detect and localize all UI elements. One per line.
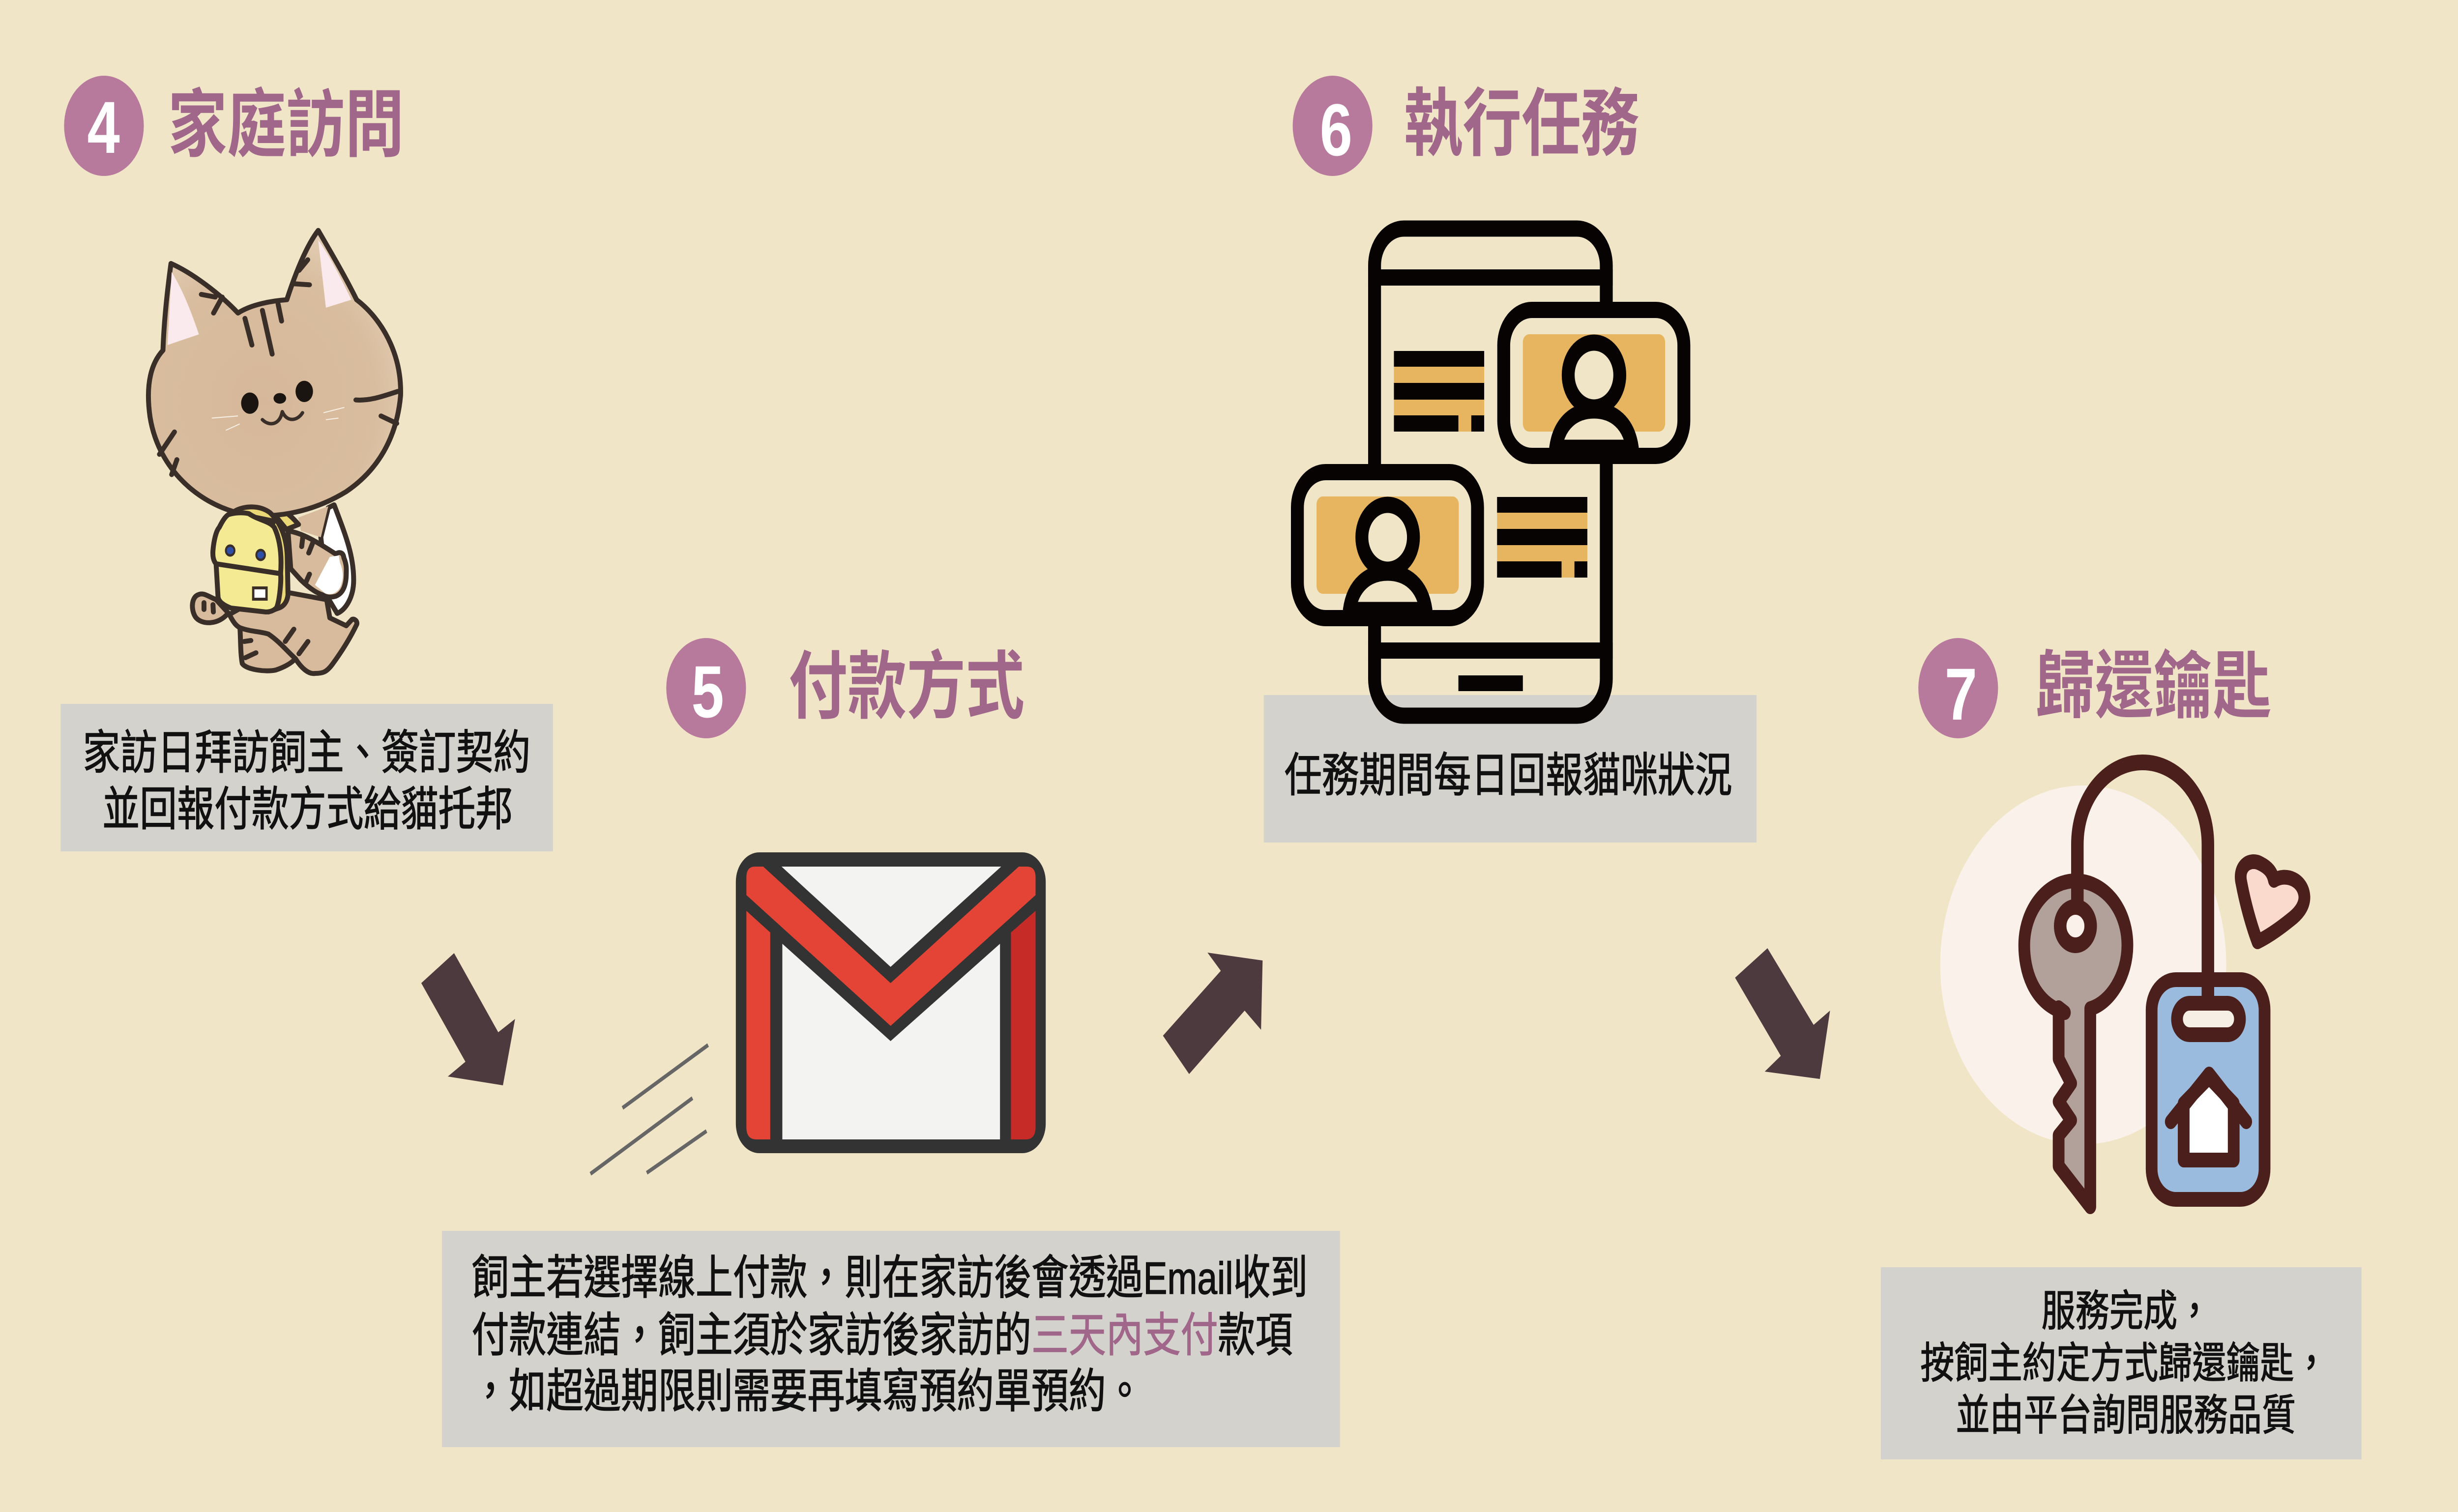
- icon: key with house tag and heart: [1940, 762, 2305, 1207]
- text block: home visit description: 並回報付款方式給貓托邦: [102, 784, 513, 836]
- text block: task description: [1264, 695, 1756, 843]
- arrow: step 4 to step 5: [421, 953, 515, 1085]
- arrow: step 5 to step 6: [1163, 953, 1262, 1074]
- illustration: tabby cat with yellow backpack: [0, 0, 401, 673]
- icon: Gmail envelope: [736, 852, 1046, 1153]
- heading: 家庭訪問: 家庭訪問: [168, 84, 404, 166]
- text block: home visit description: 家訪日拜訪飼主、簽訂契約: [83, 727, 530, 779]
- panel: step 7 return keys: [1881, 638, 2362, 1459]
- text block: home visit description: [60, 704, 553, 851]
- icon: motion lines: [590, 1045, 708, 1174]
- step number 7: 7: [1945, 653, 1977, 735]
- step number 6: 6: [1320, 88, 1352, 171]
- panel: step 6 perform task: [1264, 76, 1756, 843]
- text block: payment description: 付款連結，飼主須於家訪後家訪的三天內支付款項: [471, 1309, 1292, 1362]
- text block: payment description: ，如超過期限則需要再填寫預約單預約。: [471, 1366, 1143, 1418]
- step number 5: 5: [691, 650, 724, 733]
- text block: task description: 任務期間每日回報貓咪狀況: [1285, 750, 1732, 802]
- text block: payment description: [442, 1231, 1340, 1447]
- step number 6: [1293, 76, 1373, 176]
- step number 4: 4: [87, 86, 120, 169]
- text block: return keys description: 按飼主約定方式歸還鑰匙，: [1920, 1339, 2328, 1387]
- step number 5: [666, 638, 746, 738]
- text block: return keys description: 並由平台詢問服務品質: [1956, 1391, 2296, 1439]
- step number 7: [1918, 638, 1998, 738]
- arrow: step 6 to step 7: [1735, 948, 1830, 1079]
- icon: phone with profile cards: [1297, 229, 1684, 716]
- text block: return keys description: [1881, 1267, 2362, 1459]
- heading: 執行任務: 執行任務: [1404, 83, 1639, 165]
- panel: step 4 home visit: [0, 0, 553, 851]
- panel: step 5 payment: [442, 638, 1340, 1447]
- heading: 付款方式: 付款方式: [789, 645, 1024, 728]
- step number 4: [64, 76, 144, 176]
- text block: return keys description: 服務完成，: [2042, 1287, 2211, 1335]
- text block: payment description: 飼主若選擇線上付款，則在家訪後會透過Email收到: [471, 1252, 1308, 1304]
- heading: 歸還鑰匙: 歸還鑰匙: [2036, 645, 2272, 727]
